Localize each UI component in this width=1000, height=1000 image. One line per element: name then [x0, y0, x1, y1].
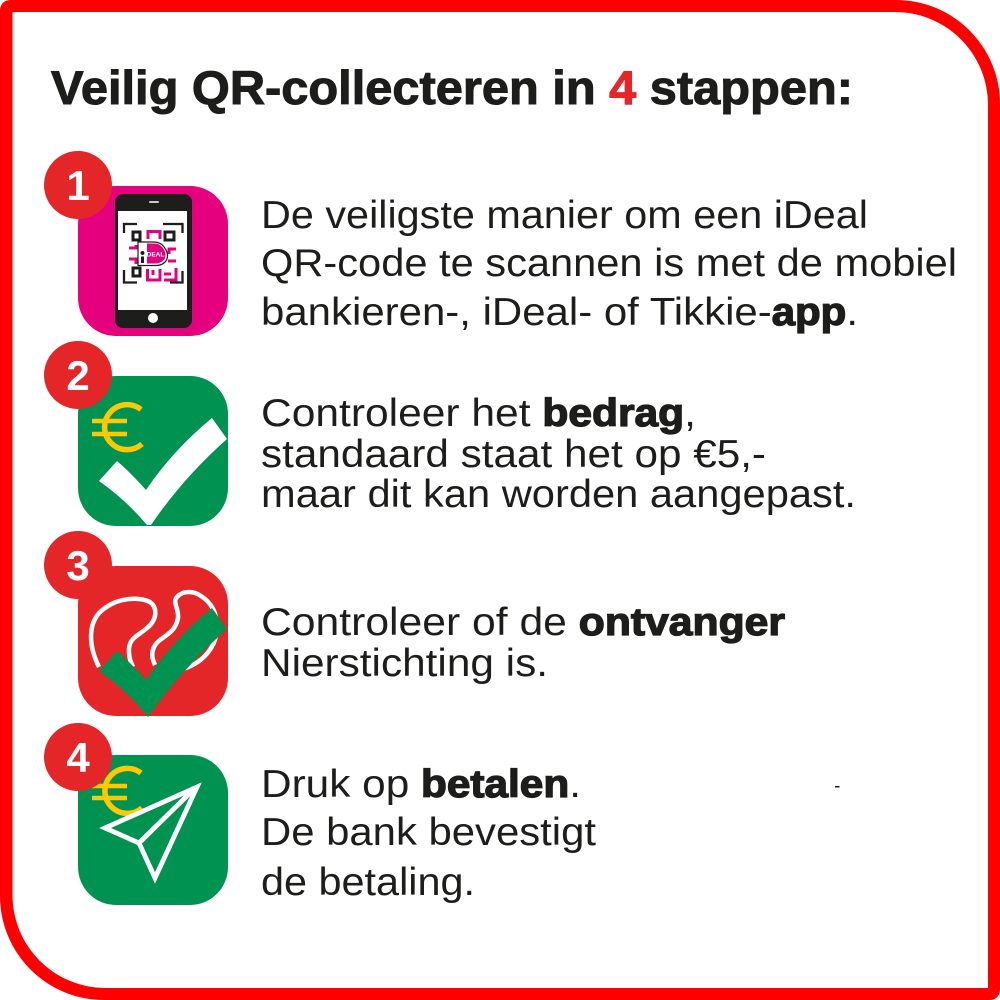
icon: euro and check mark [78, 376, 228, 526]
text: step 1 [261, 194, 957, 334]
icon: phone scanning iDeal QR code [78, 186, 228, 336]
text: step 1: De veiligste manier om een iDeal [261, 194, 868, 237]
step 3 [44, 531, 785, 717]
number badge 2: 2 [66, 352, 90, 399]
text: step 2 [261, 392, 856, 516]
number badge 4 [44, 723, 112, 791]
text: step 4 [261, 763, 596, 904]
text: step 3: Controleer of de ontvanger [261, 601, 785, 644]
text: step 2: Controleer het bedrag , [261, 392, 696, 435]
number badge 4: 4 [66, 734, 90, 781]
text: step 2: standaard staat het op €5,- [261, 433, 766, 476]
text: step 4: De bank bevestigt [261, 811, 596, 854]
icon: euro and paper plane [78, 755, 228, 905]
step 2 [44, 341, 856, 526]
text: step 2: maar dit kan worden aangepast. [261, 473, 856, 516]
number badge 1: 1 [66, 162, 90, 209]
number badge 3: 3 [66, 542, 90, 589]
icon: kidney and check mark [78, 566, 228, 717]
step 1 [44, 151, 957, 336]
small stray dash [835, 786, 840, 788]
text: step 1: bankieren-, iDeal- of Tikkie- app. [261, 291, 858, 334]
number badge 3 [44, 531, 112, 599]
text: step 4: Druk op betalen . [261, 763, 581, 806]
text: step 3: Nierstichting is. [261, 642, 548, 685]
number badge 2 [44, 341, 112, 409]
text: step 3 [261, 601, 785, 685]
title: Veilig QR-collecteren in 4 stappen: [51, 61, 853, 114]
text: step 4: de betaling. [261, 861, 475, 904]
number badge 1 [44, 151, 112, 219]
icon: phone scanning iDeal QR code: DEAL [147, 252, 164, 258]
text: step 1: QR-code te scannen is met de mobiel [261, 242, 957, 285]
step 4 [44, 723, 840, 905]
